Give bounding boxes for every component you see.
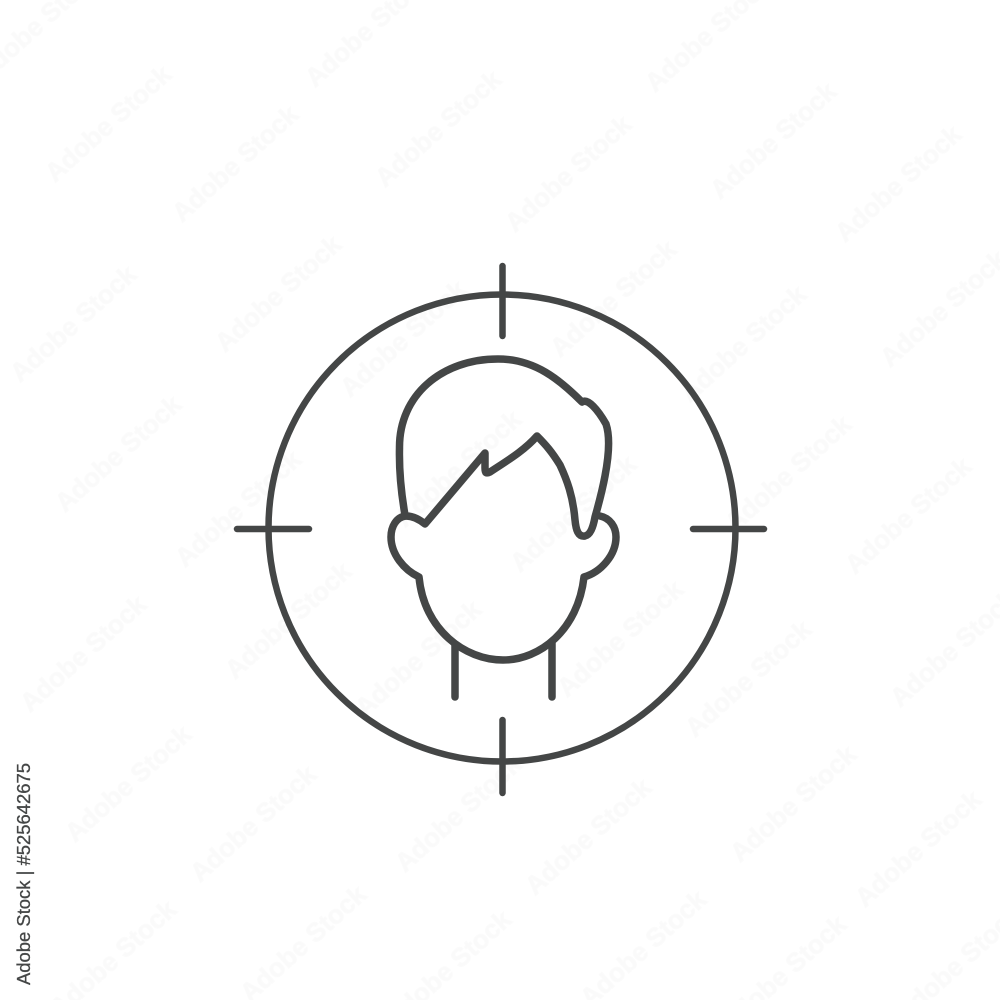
icon: faceless man head [391,359,616,697]
watermark pattern: Adobe Stock [334,274,472,403]
watermark pattern: Adobe Stock [209,229,347,358]
watermark pattern: Adobe Stock [499,109,637,238]
watermark pattern: Adobe Stock [679,614,817,743]
watermark pattern: Adobe Stock [39,59,177,188]
watermark pattern: Adobe Stock [389,749,527,878]
watermark pattern: Adobe Stock [369,64,507,193]
watermark pattern: Adobe Stock [504,449,642,578]
watermark pattern: Adobe Stock [719,409,857,538]
watermark pattern: Adobe Stock [544,234,682,363]
watermark pattern: Adobe Stock [219,556,357,685]
stock id text: Adobe Stock | #525642675 [14,763,34,985]
watermark pattern: Adobe Stock [166,99,304,228]
watermark pattern: Adobe Stock [849,784,987,913]
watermark pattern: Adobe Stock [349,594,487,723]
watermark pattern: Adobe Stock [839,451,977,580]
watermark pattern: Adobe Stock [724,739,862,868]
watermark pattern: Adobe Stock [14,589,152,718]
watermark pattern: Adobe Stock [519,772,657,901]
watermark pattern: Adobe Stock [674,279,812,408]
watermark pattern: Adobe Stock [4,259,142,388]
watermark pattern: Adobe Stock [551,574,689,703]
watermark pattern: Adobe Stock [829,119,967,248]
icon: crosshair target [237,266,764,793]
watermark pattern: Adobe Stock [389,404,527,533]
watermark pattern: Adobe Stock [704,76,842,205]
watermark pattern: Adobe Stock [184,759,322,888]
watermark pattern: Adobe Stock [59,719,197,848]
watermark pattern: Adobe Stock [49,389,187,518]
watermark pattern: Adobe Stock [169,444,307,573]
